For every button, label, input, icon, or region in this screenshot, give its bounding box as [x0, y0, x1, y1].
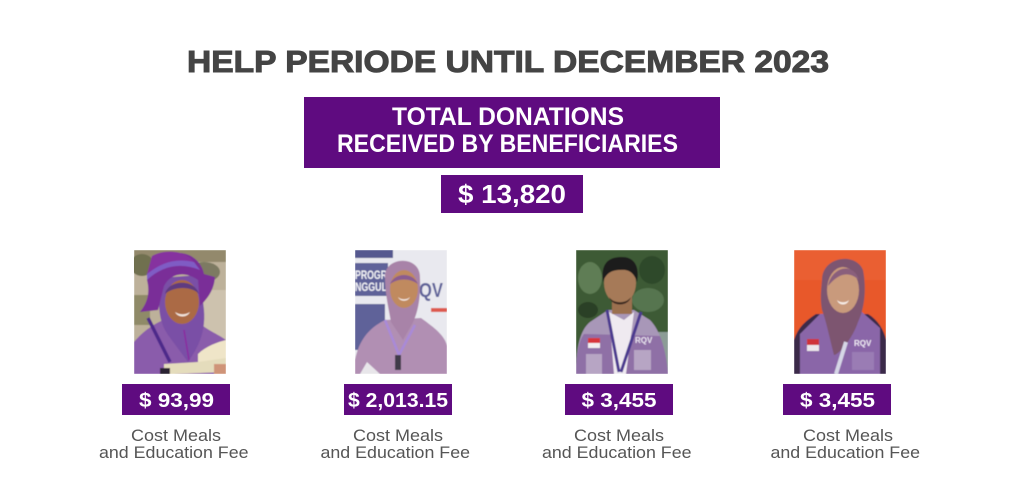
- caption 1: [99, 426, 248, 462]
- amount badge 4: [783, 384, 891, 415]
- panel: total donations heading: RECEIVED BY BENEFICIARIES: [337, 130, 678, 158]
- photo: beneficiary 3: [576, 250, 668, 374]
- photo: beneficiary 2: [355, 250, 447, 374]
- photo: beneficiary 2: QV: [419, 280, 444, 302]
- title: HELP PERIODE UNTIL DECEMBER 2023: [187, 44, 829, 79]
- total amount badge: [441, 175, 583, 213]
- photo: beneficiary 2: NGGUL: [355, 280, 387, 294]
- panel: total donations heading: TOTAL DONATIONS: [392, 103, 624, 131]
- photo: beneficiary 4: RQV: [854, 339, 872, 348]
- photo: beneficiary 4: [794, 250, 886, 374]
- caption 4: [770, 426, 920, 462]
- photo: beneficiary 1: [130, 250, 226, 374]
- amount badge 4: $ 3,455: [800, 390, 875, 412]
- amount badge 3: [565, 384, 673, 415]
- caption 1: and Education Fee: [99, 443, 248, 462]
- panel: total donations heading: [304, 97, 720, 168]
- total amount badge: $ 13,820: [458, 179, 566, 209]
- caption 1: Cost Meals: [131, 426, 221, 445]
- amount badge 1: [122, 384, 230, 415]
- photo: beneficiary 3: RQV: [635, 336, 653, 345]
- caption 2: and Education Fee: [320, 443, 470, 462]
- amount badge 2: [344, 384, 452, 415]
- amount badge 1: $ 93,99: [139, 390, 214, 412]
- caption 4: Cost Meals: [803, 426, 893, 445]
- caption 2: Cost Meals: [353, 426, 443, 445]
- caption 2: [320, 426, 470, 462]
- caption 4: and Education Fee: [770, 443, 920, 462]
- caption 3: [542, 426, 692, 462]
- caption 3: and Education Fee: [542, 443, 692, 462]
- amount badge 3: $ 3,455: [582, 390, 656, 412]
- photo: beneficiary 2: PROGR: [355, 268, 387, 282]
- caption 3: Cost Meals: [574, 426, 664, 445]
- amount badge 2: $ 2,013.15: [348, 390, 448, 412]
